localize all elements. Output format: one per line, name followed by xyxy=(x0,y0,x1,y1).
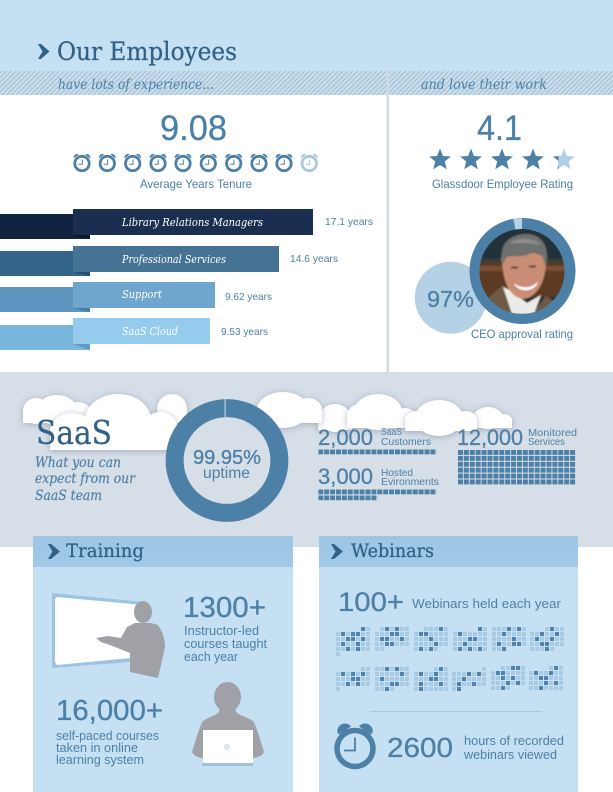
SaaS description: SaaS team xyxy=(35,488,102,504)
header band xyxy=(0,0,613,71)
stat: hours viewed: webinars viewed xyxy=(463,748,557,762)
stat: SaaS customers: Customers xyxy=(381,436,431,448)
bar: SaaS Cloud: 9.53 years xyxy=(221,326,268,338)
CEO approval value: 97% xyxy=(427,286,474,312)
bar: Professional Services xyxy=(0,246,338,276)
icon row: clocks xyxy=(74,154,317,171)
bar: Professional Services: 14.6 years xyxy=(290,253,338,265)
stat: self-paced courses: self-paced courses xyxy=(56,729,159,743)
icon: person at laptop xyxy=(192,682,264,766)
stat: hours viewed: hours of recorded xyxy=(464,734,564,748)
column divider xyxy=(386,71,389,372)
icon: presenter at screen xyxy=(52,593,165,678)
bar: SaaS Cloud xyxy=(0,318,268,350)
stat: SaaS customers: SaaS xyxy=(381,426,402,438)
stat: monitored services: Services xyxy=(528,436,565,448)
uptime value: 99.95% xyxy=(193,447,261,469)
clouds xyxy=(23,392,512,450)
SaaS description: What you can xyxy=(35,455,121,471)
subheading: love their work: and love their work xyxy=(421,77,547,93)
Training heading: Training xyxy=(66,540,144,562)
tenure label: Average Years Tenure xyxy=(140,177,252,191)
stat: hours viewed xyxy=(387,732,564,763)
stat: instructor-led courses: 1300+ xyxy=(183,592,266,624)
CEO approval ring xyxy=(470,218,576,324)
panel: SaaS background xyxy=(0,372,613,547)
Training header bar xyxy=(33,536,293,567)
bar: Library Relations Managers: Library Relations Managers xyxy=(121,216,263,229)
panel: Training xyxy=(33,536,293,792)
stat: SaaS customers xyxy=(318,425,436,454)
stat: instructor-led courses: each year xyxy=(184,650,238,664)
uptime donut xyxy=(175,399,279,513)
rating label: Glassdoor Employee Rating xyxy=(432,177,573,191)
hatched subheading band xyxy=(0,71,613,95)
stat: hosted environments: 3,000 xyxy=(318,464,373,489)
icon row: stars xyxy=(429,148,575,169)
bar: Support: 9.62 years xyxy=(225,291,272,303)
icon: large clock xyxy=(337,723,373,766)
icon: title chevron xyxy=(38,44,50,59)
panel: Webinars xyxy=(319,536,578,792)
bar: Support: Support xyxy=(122,288,163,301)
subheading: experience: have lots of experience... xyxy=(58,77,214,93)
bar: Support xyxy=(0,282,272,312)
bar chart: tenure by team xyxy=(0,209,373,350)
rating number: 4.1 xyxy=(477,109,522,148)
stat: webinars per year xyxy=(338,587,562,617)
stat: monitored services xyxy=(457,425,577,485)
Webinars header bar xyxy=(319,536,578,567)
stat: instructor-led courses xyxy=(183,592,268,664)
stat: self-paced courses: taken in online xyxy=(56,741,138,755)
stat: self-paced courses xyxy=(56,695,163,767)
stat: self-paced courses: learning system xyxy=(56,753,144,767)
CEO approval bubble xyxy=(415,262,487,334)
tenure number: 9.08 xyxy=(160,109,227,148)
waffle chart: webinars xyxy=(336,627,564,691)
stat: webinars per year: Webinars held each year xyxy=(412,596,562,611)
SaaS description xyxy=(35,455,136,504)
CEO approval label: CEO approval rating xyxy=(471,327,573,341)
bar: SaaS Cloud: SaaS Cloud xyxy=(122,325,178,338)
CEO portrait xyxy=(478,228,568,314)
stat: monitored services: Monitored xyxy=(528,427,577,439)
icon: Webinars chevron xyxy=(331,544,343,559)
stat: instructor-led courses: courses taught xyxy=(184,637,268,651)
stat: hosted environments: Evironments xyxy=(381,476,439,488)
stat: hosted environments xyxy=(318,464,439,500)
stat: SaaS customers: 2,000 xyxy=(318,425,373,450)
title: Our Employees xyxy=(57,37,237,66)
stat: self-paced courses: 16,000+ xyxy=(56,695,163,727)
stat: webinars per year: 100+ xyxy=(338,587,404,617)
bar: Professional Services: Professional Services xyxy=(121,253,226,266)
stat: hosted environments: Hosted xyxy=(381,467,413,479)
icon: Training chevron xyxy=(48,544,60,559)
stat: monitored services: 12,000 xyxy=(457,425,523,450)
stat: hours viewed: 2600 xyxy=(387,732,453,763)
uptime label: uptime xyxy=(203,465,250,482)
bar: Library Relations Managers xyxy=(0,209,373,239)
SaaS description: expect from our xyxy=(35,471,136,487)
SaaS heading: SaaS xyxy=(36,413,112,452)
Webinars heading: Webinars xyxy=(351,540,434,562)
bar: Library Relations Managers: 17.1 years xyxy=(325,216,373,228)
stat: instructor-led courses: Instructor-led xyxy=(184,624,259,638)
